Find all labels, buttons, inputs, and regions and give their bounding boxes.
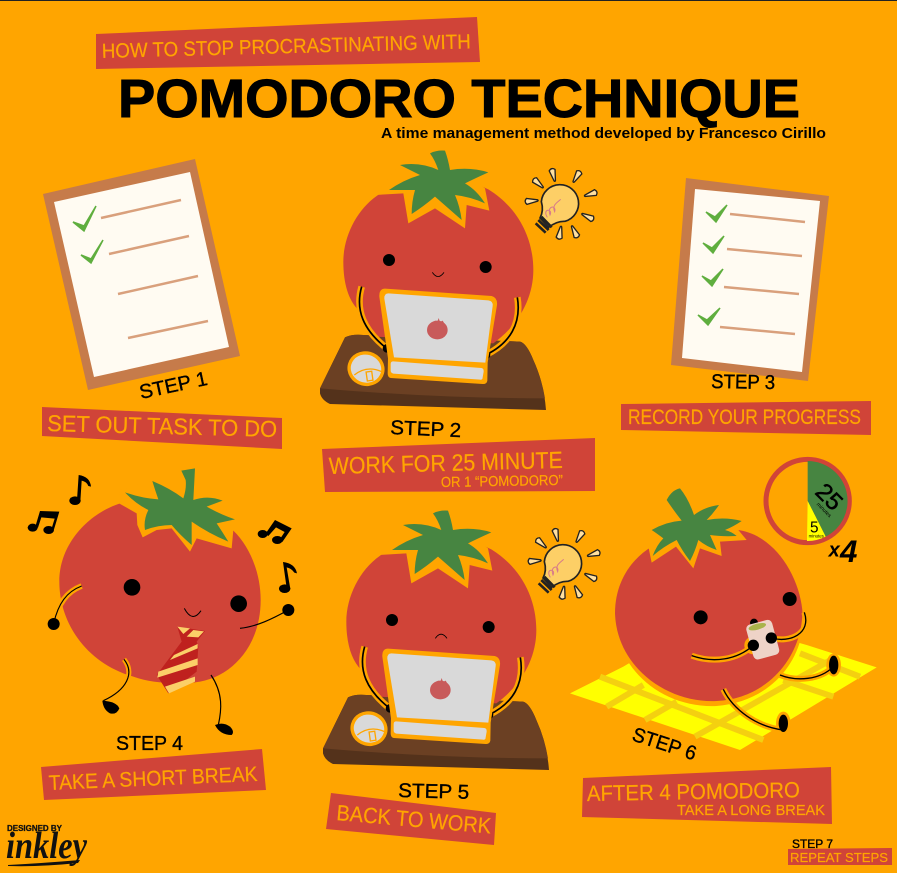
tie bbox=[157, 627, 205, 693]
laptop bbox=[382, 649, 500, 744]
step 6 relaxing tomato bbox=[570, 459, 877, 750]
step 3 checklist illustration bbox=[671, 178, 829, 381]
step 3 label: STEP 3 bbox=[711, 371, 775, 394]
step 4 banner: TAKE A SHORT BREAK bbox=[48, 763, 258, 795]
light bulb bbox=[528, 528, 601, 600]
heading banner: HOW TO STOP PROCRASTINATING WITH bbox=[102, 30, 471, 63]
step 5 character back at laptop bbox=[323, 511, 601, 770]
step 2 label: STEP 2 bbox=[390, 417, 462, 442]
times four bbox=[828, 534, 857, 569]
leaf bbox=[648, 488, 747, 568]
timer: 5 bbox=[810, 520, 819, 537]
step 1 label: STEP 1 bbox=[137, 368, 210, 404]
step 3 banner bbox=[621, 401, 871, 435]
limbs bbox=[48, 586, 294, 735]
timer: minutes bbox=[809, 533, 824, 538]
mouse bbox=[346, 707, 392, 750]
desk bbox=[320, 335, 546, 410]
step 4 banner bbox=[41, 749, 266, 800]
step 6 banner: AFTER 4 POMODORO bbox=[587, 777, 800, 806]
step 5 banner bbox=[326, 793, 496, 845]
leaf bbox=[119, 468, 235, 552]
step 2 banner bbox=[322, 438, 595, 492]
picnic blanket bbox=[570, 617, 877, 750]
arms bbox=[359, 287, 518, 359]
step 2 banner: OR 1 “POMODORO” bbox=[441, 473, 563, 491]
face bbox=[386, 614, 495, 638]
step 5 label: STEP 5 bbox=[398, 780, 469, 804]
step 2 banner: WORK FOR 25 MINUTE bbox=[328, 447, 563, 479]
heading banner bbox=[96, 17, 480, 69]
limbs bbox=[692, 612, 841, 735]
step 6 banner bbox=[582, 767, 832, 824]
leaf bbox=[378, 511, 492, 588]
step 6 banner: TAKE A LONG BREAK bbox=[677, 802, 825, 819]
times four: x bbox=[828, 540, 841, 562]
title: POMODORO TECHNIQUE bbox=[118, 69, 800, 129]
step 6 label: STEP 6 bbox=[629, 724, 699, 765]
laptop bbox=[379, 289, 497, 384]
light bulb bbox=[525, 168, 598, 240]
tomato body bbox=[343, 173, 533, 343]
step 4 label: STEP 4 bbox=[116, 733, 183, 755]
timer bbox=[766, 459, 849, 543]
mouse bbox=[343, 347, 389, 390]
step 1 checklist illustration bbox=[43, 159, 240, 390]
times four: 4 bbox=[839, 534, 857, 569]
body bbox=[614, 527, 804, 706]
subtitle: A time management method developed by Francesco Cirillo bbox=[381, 126, 826, 142]
music notes bbox=[28, 475, 297, 593]
designer credit: inkley bbox=[6, 825, 87, 867]
step 2 character at laptop bbox=[320, 151, 598, 410]
designer credit: DESIGNED BY bbox=[7, 823, 62, 833]
tomato body bbox=[346, 533, 536, 703]
leaf bbox=[375, 151, 489, 228]
step 7 banner: REPEAT STEPS bbox=[790, 850, 888, 865]
step 1 banner: SET OUT TASK TO DO bbox=[47, 410, 277, 442]
desk bbox=[323, 695, 549, 770]
body bbox=[59, 493, 261, 683]
arms bbox=[362, 647, 521, 719]
face bbox=[694, 592, 797, 627]
hands and feet bbox=[692, 612, 838, 732]
mug bbox=[745, 619, 780, 660]
timer: minutes bbox=[815, 502, 832, 519]
step 4 dancing tomato bbox=[28, 468, 297, 735]
face bbox=[383, 254, 492, 276]
step 7 label: STEP 7 bbox=[792, 837, 833, 851]
face bbox=[124, 579, 247, 616]
step 5 banner: BACK TO WORK bbox=[336, 800, 492, 839]
timer: 25 bbox=[810, 478, 848, 516]
